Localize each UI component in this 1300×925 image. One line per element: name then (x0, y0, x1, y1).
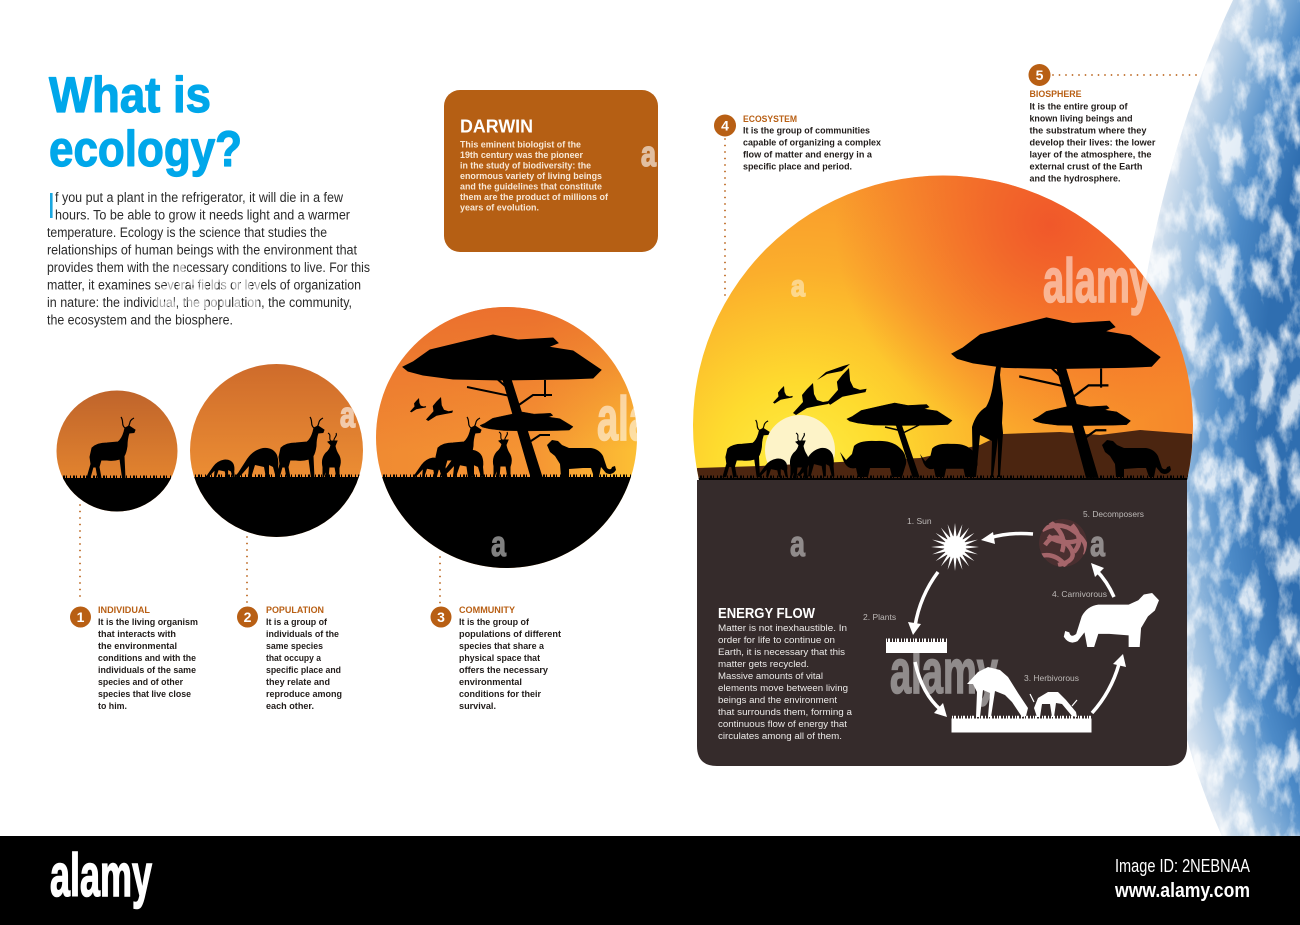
herbivores group (952, 667, 1091, 732)
explanation text: that surrounds them, forming a (718, 707, 853, 718)
label 1: individual: species that live close (98, 689, 191, 699)
title (49, 67, 242, 177)
panel: darwin: 19th century was the pioneer (460, 150, 583, 160)
label 2: population: individuals of the (266, 629, 339, 639)
panel: darwin: DARWIN (460, 116, 533, 136)
cycle labels: 5. Decomposers (1083, 509, 1144, 519)
explanation text: circulates among all of them. (718, 731, 842, 742)
panel: darwin: a (641, 133, 657, 174)
explanation text (718, 623, 853, 742)
label 4: ecosystem: specific place and period. (743, 162, 852, 172)
earth biosphere globe (1146, 0, 1300, 836)
cycle labels: 1. Sun (907, 516, 932, 526)
intro paragraph: hours. To be able to grow it needs light and a warmer (55, 208, 350, 222)
tree, animals and birds (403, 335, 616, 478)
intro paragraph (47, 190, 370, 328)
label 1: individual: that interacts with (98, 629, 176, 639)
arrow: herbivores to carnivores (1092, 654, 1126, 713)
label 3: community: survival. (459, 701, 496, 711)
trees (847, 318, 1160, 477)
circle: community: a (491, 523, 507, 564)
intro paragraph: relationships of human beings with the environment that (47, 242, 357, 258)
ecosystem sunset scene (690, 170, 1200, 485)
birds (773, 364, 867, 415)
herd of impalas (205, 417, 340, 479)
circle: population (190, 364, 363, 537)
label 2: population: that occupy a (266, 653, 322, 663)
cycle labels (863, 509, 1144, 683)
label 2: population: specific place and (266, 665, 341, 675)
footer band: Image ID: 2NEBNAA (1115, 856, 1250, 876)
arrow: plants to herbivores (915, 662, 947, 717)
watermark in panel (790, 523, 1106, 707)
label 5: biosphere: layer of the atmosphere, the (1030, 150, 1152, 160)
explanation text: matter gets recycled. (718, 659, 809, 670)
watermark in panel: a (1090, 523, 1106, 564)
label 3: community: offers the necessary (459, 665, 549, 675)
label 2: population: each other. (266, 701, 314, 711)
label 1: individual: INDIVIDUAL (98, 605, 150, 616)
panel: darwin: and the guidelines that constitute (460, 182, 602, 192)
intro paragraph: in nature: the individual, the population, the community, (47, 295, 352, 310)
title: What is (49, 67, 211, 123)
watermark in panel: alamy (890, 638, 998, 707)
explanation text: continuous flow of energy that (718, 719, 847, 730)
arrow: carnivores to decomposers (1091, 563, 1114, 597)
circle: population: a (340, 394, 356, 435)
label 3: community: environmental (459, 677, 522, 687)
label 4: ecosystem: It is the group of communities (743, 126, 870, 136)
footer band (0, 836, 1300, 925)
arrow: decomposers to sun (981, 532, 1033, 544)
label 4: ecosystem: ECOSYSTEM (743, 114, 797, 125)
label 5: biosphere: BIOSPHERE (1030, 89, 1082, 100)
cycle labels: 3. Herbivorous (1024, 673, 1079, 683)
label 3: community: 3 (437, 609, 445, 625)
circle: community: alamy (597, 385, 705, 454)
circle: individual (56, 390, 178, 512)
watermark in panel: a (790, 523, 806, 564)
label 4: ecosystem: 4 (721, 118, 729, 134)
impala silhouette (87, 417, 135, 478)
intro paragraph: matter, it examines several fields or levels of organization (47, 278, 361, 292)
title: ecology? (49, 121, 242, 177)
label 2: population (237, 605, 342, 711)
explanation text: Massive amounts of vital (718, 671, 823, 682)
explanation text: elements move between living (718, 683, 848, 694)
label 4: ecosystem: capable of organizing a complex (743, 138, 882, 148)
label 5: biosphere: known living beings and (1030, 114, 1133, 124)
heading: ENERGY FLOW (718, 605, 816, 622)
giraffe (972, 363, 1003, 477)
panel: darwin: enormous variety of living beings (460, 171, 602, 181)
label 2: population: POPULATION (266, 605, 324, 616)
label 1: individual: conditions and with the (98, 653, 196, 663)
label 5: biosphere (1028, 64, 1156, 184)
label 5: biosphere: external crust of the Earth (1030, 162, 1143, 172)
plants bar (886, 640, 947, 653)
label 1: individual: species and of other (98, 677, 183, 687)
label 3: community: species that share a (459, 641, 545, 651)
label 1: individual: to him. (98, 701, 127, 711)
label 5: biosphere: develop their lives: the lower (1030, 138, 1156, 148)
explanation text: Matter is not inexhaustible. In (718, 623, 847, 634)
label 2: population: reproduce among (266, 689, 342, 699)
label 1: individual (70, 605, 198, 711)
lion (1102, 440, 1171, 477)
panel: darwin: This eminent biologist of the (460, 140, 581, 150)
intro paragraph: the ecosystem and the biosphere. (47, 312, 233, 328)
arrow: sun to plants (908, 572, 938, 635)
antelopes (723, 420, 834, 479)
rhinos (840, 441, 978, 477)
intro paragraph: provides them with the necessary conditions to live. For this (47, 260, 370, 275)
ground line (697, 476, 1192, 478)
label 2: population: 2 (244, 609, 252, 625)
cycle labels: 2. Plants (863, 612, 896, 622)
explanation text: order for life to continue on (718, 635, 835, 646)
ecosystem sunset scene: alamy (1043, 247, 1151, 316)
dotted connector lines (80, 75, 1198, 604)
icon: worms decomposers (1039, 519, 1087, 567)
label 3: community: conditions for their (459, 689, 541, 699)
sun (765, 415, 835, 465)
intro paragraph: f you put a plant in the refrigerator, it will die in a few (55, 190, 343, 205)
panel: darwin: them are the product of millions of (460, 192, 609, 202)
circle: community (376, 307, 637, 568)
carnivore lion (1064, 593, 1159, 647)
intro paragraph: temperature. Ecology is the science that studies the (47, 225, 327, 240)
label 2: population: It is a group of (266, 617, 328, 627)
panel: darwin (444, 90, 658, 252)
label 4: ecosystem: flow of matter and energy in a (743, 150, 873, 160)
label 2: population: they relate and (266, 677, 330, 687)
label 2: population: same species (266, 641, 323, 651)
footer band: www.alamy.com (1114, 880, 1250, 902)
label 1: individual: 1 (77, 609, 85, 625)
label 1: individual: individuals of the same (98, 665, 196, 675)
label 5: biosphere: and the hydrosphere. (1030, 174, 1120, 184)
watermark over intro: alamy (155, 253, 263, 322)
cycle labels: 4. Carnivorous (1052, 589, 1107, 599)
ecosystem sunset scene: a (791, 270, 805, 303)
label 5: biosphere: the substratum where they (1030, 126, 1147, 136)
label 3: community: COMMUNITY (459, 605, 516, 616)
footer band: alamy (50, 842, 152, 909)
label 3: community: It is the group of (459, 617, 530, 627)
label 3: community: populations of different (459, 629, 561, 639)
label 3: community (430, 605, 561, 711)
hills (697, 430, 1192, 480)
label 3: community: physical space that (459, 653, 540, 663)
panel: darwin: years of evolution. (460, 202, 539, 212)
label 1: individual: It is the living organism (98, 617, 198, 627)
explanation text: beings and the environment (718, 695, 837, 706)
icon: sun (931, 523, 979, 571)
label 4: ecosystem (714, 114, 882, 172)
panel: darwin: in the study of biodiversity: the (460, 160, 591, 170)
panel: energy flow (697, 480, 1187, 766)
explanation text: Earth, it is necessary that this (718, 647, 845, 658)
label 5: biosphere: 5 (1036, 67, 1044, 83)
label 5: biosphere: It is the entire group of (1030, 102, 1128, 112)
label 1: individual: the environmental (98, 641, 177, 651)
